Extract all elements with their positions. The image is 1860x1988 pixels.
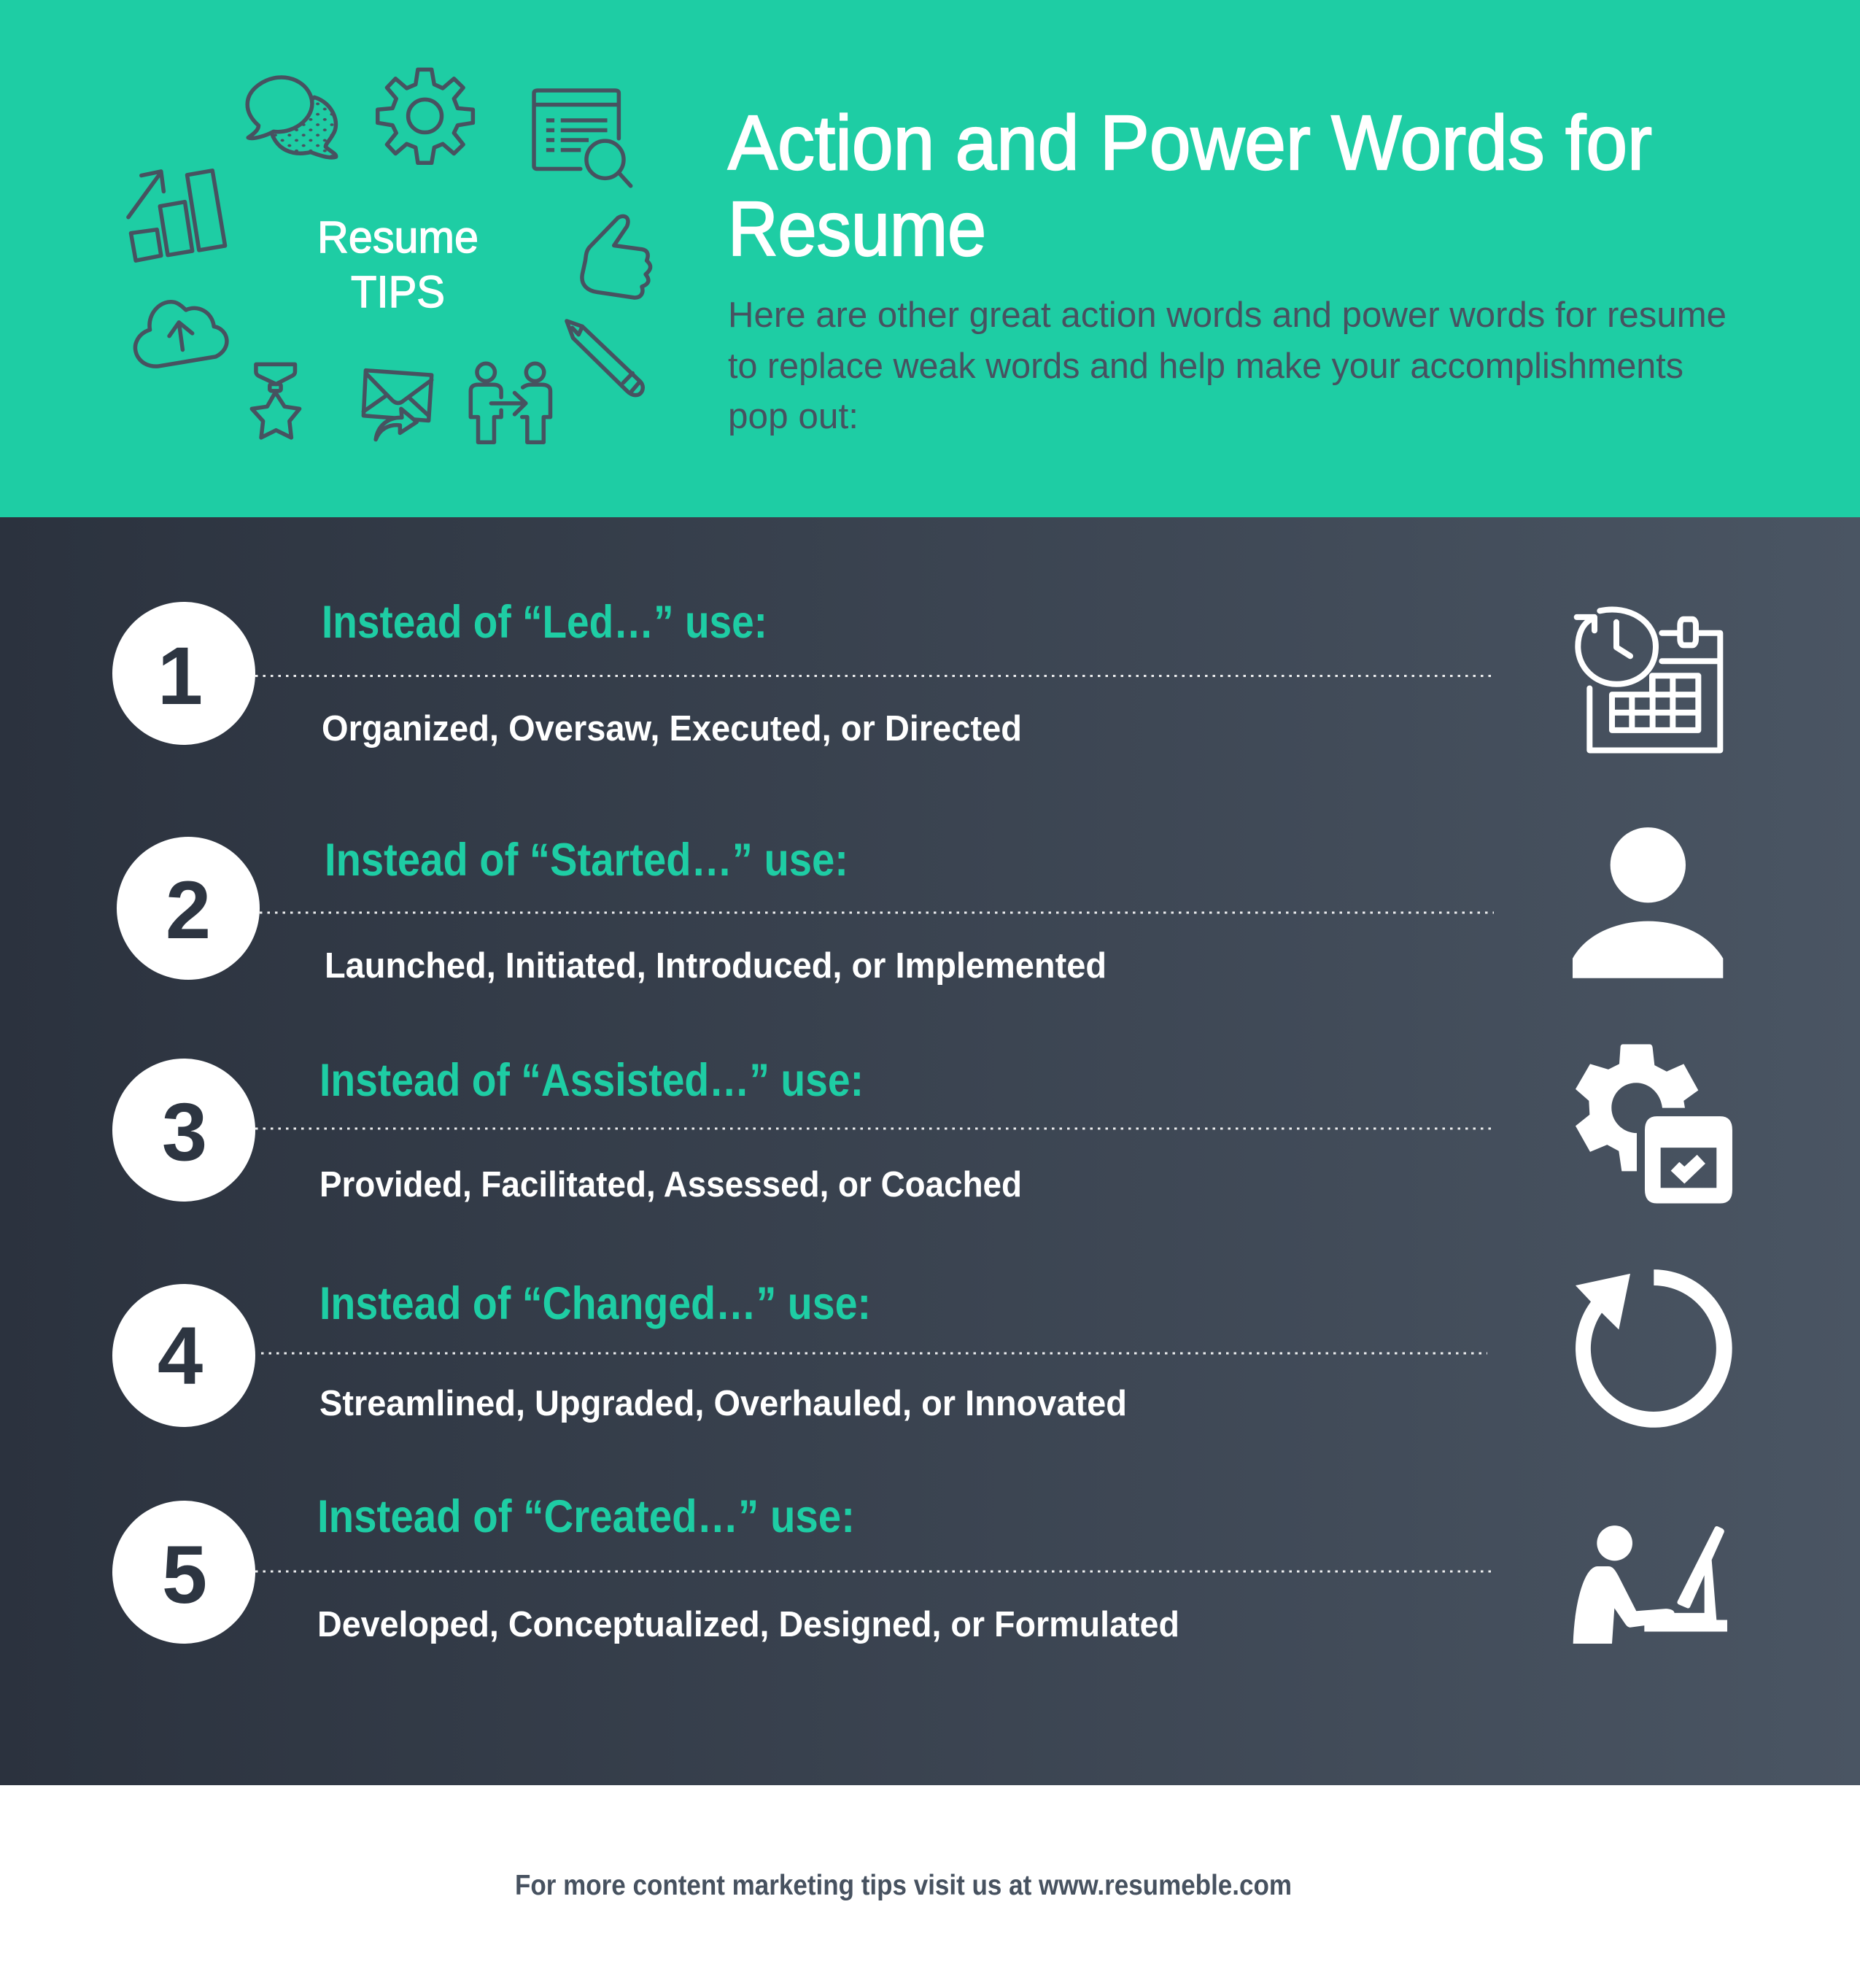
number circle 1: 1 [158, 630, 203, 722]
number circle 5: 5 [162, 1529, 207, 1620]
icon: two people [470, 363, 550, 442]
words 1: Organized, Oversaw, Executed, or Directed [322, 709, 1022, 749]
row 2 [117, 835, 1494, 986]
resume tips label [317, 212, 478, 317]
intro text: Here are other great action words and power words for resume [728, 295, 1727, 335]
row 3 [112, 1055, 1492, 1204]
icon: calendar with clock [1577, 609, 1720, 750]
heading 4: Instead of “Changed…” use: [319, 1278, 871, 1329]
icon: thumbs up [582, 216, 651, 298]
words 3: Provided, Facilitated, Assessed, or Coached [319, 1165, 1022, 1204]
heading 5: Instead of “Created…” use: [317, 1491, 855, 1542]
intro text [728, 295, 1727, 436]
row 1 [112, 597, 1491, 749]
icon: envelope with arrow [363, 371, 432, 439]
icon: refresh arrow [1576, 1269, 1732, 1428]
icon ring: resume tips [128, 69, 651, 442]
title: Action and Power Words for [728, 100, 1652, 186]
resume tips label: Resume [317, 212, 478, 262]
heading 1: Instead of “Led…” use: [322, 597, 767, 648]
row 4 [112, 1278, 1487, 1427]
words 5: Developed, Conceptualized, Designed, or Formulated [317, 1605, 1179, 1644]
icon: person [1573, 827, 1723, 978]
heading 3: Instead of “Assisted…” use: [319, 1055, 864, 1106]
number circle 5 [112, 1501, 255, 1644]
resume tips label: TIPS [351, 267, 445, 317]
icon: document with magnifier [534, 90, 631, 186]
title [728, 100, 1652, 272]
heading 2: Instead of “Started…” use: [325, 835, 848, 886]
number circle 2: 2 [166, 865, 211, 956]
icon: cloud upload [135, 302, 227, 366]
number circle 3 [112, 1059, 255, 1202]
icon: gear [378, 69, 473, 163]
title: Resume [728, 186, 986, 272]
icon: gear with checked calendar [1576, 1044, 1732, 1204]
row 5 [112, 1491, 1492, 1644]
panel: dark list background [0, 517, 1860, 1785]
words 2: Launched, Initiated, Introduced, or Implemented [325, 946, 1107, 986]
footer text: For more content marketing tips visit us at www.resumeble.com [515, 1870, 1292, 1901]
number circle 4 [112, 1284, 255, 1427]
icon: medal star [252, 364, 300, 438]
number circle 1 [112, 602, 255, 745]
icon: person at computer [1573, 1525, 1727, 1644]
number circle 3: 3 [162, 1086, 207, 1177]
intro text: pop out: [728, 397, 859, 436]
number circle 2 [117, 837, 260, 980]
panel: header background [0, 0, 1860, 517]
panel: footer background [0, 1785, 1860, 1988]
icon: pencil [567, 321, 643, 395]
words 4: Streamlined, Upgraded, Overhauled, or Innovated [319, 1384, 1127, 1423]
icon: bar chart with arrow [128, 171, 225, 260]
intro text: to replace weak words and help make your accomplishments [728, 347, 1683, 386]
icon: chat bubbles [247, 77, 336, 158]
number circle 4: 4 [158, 1310, 203, 1401]
